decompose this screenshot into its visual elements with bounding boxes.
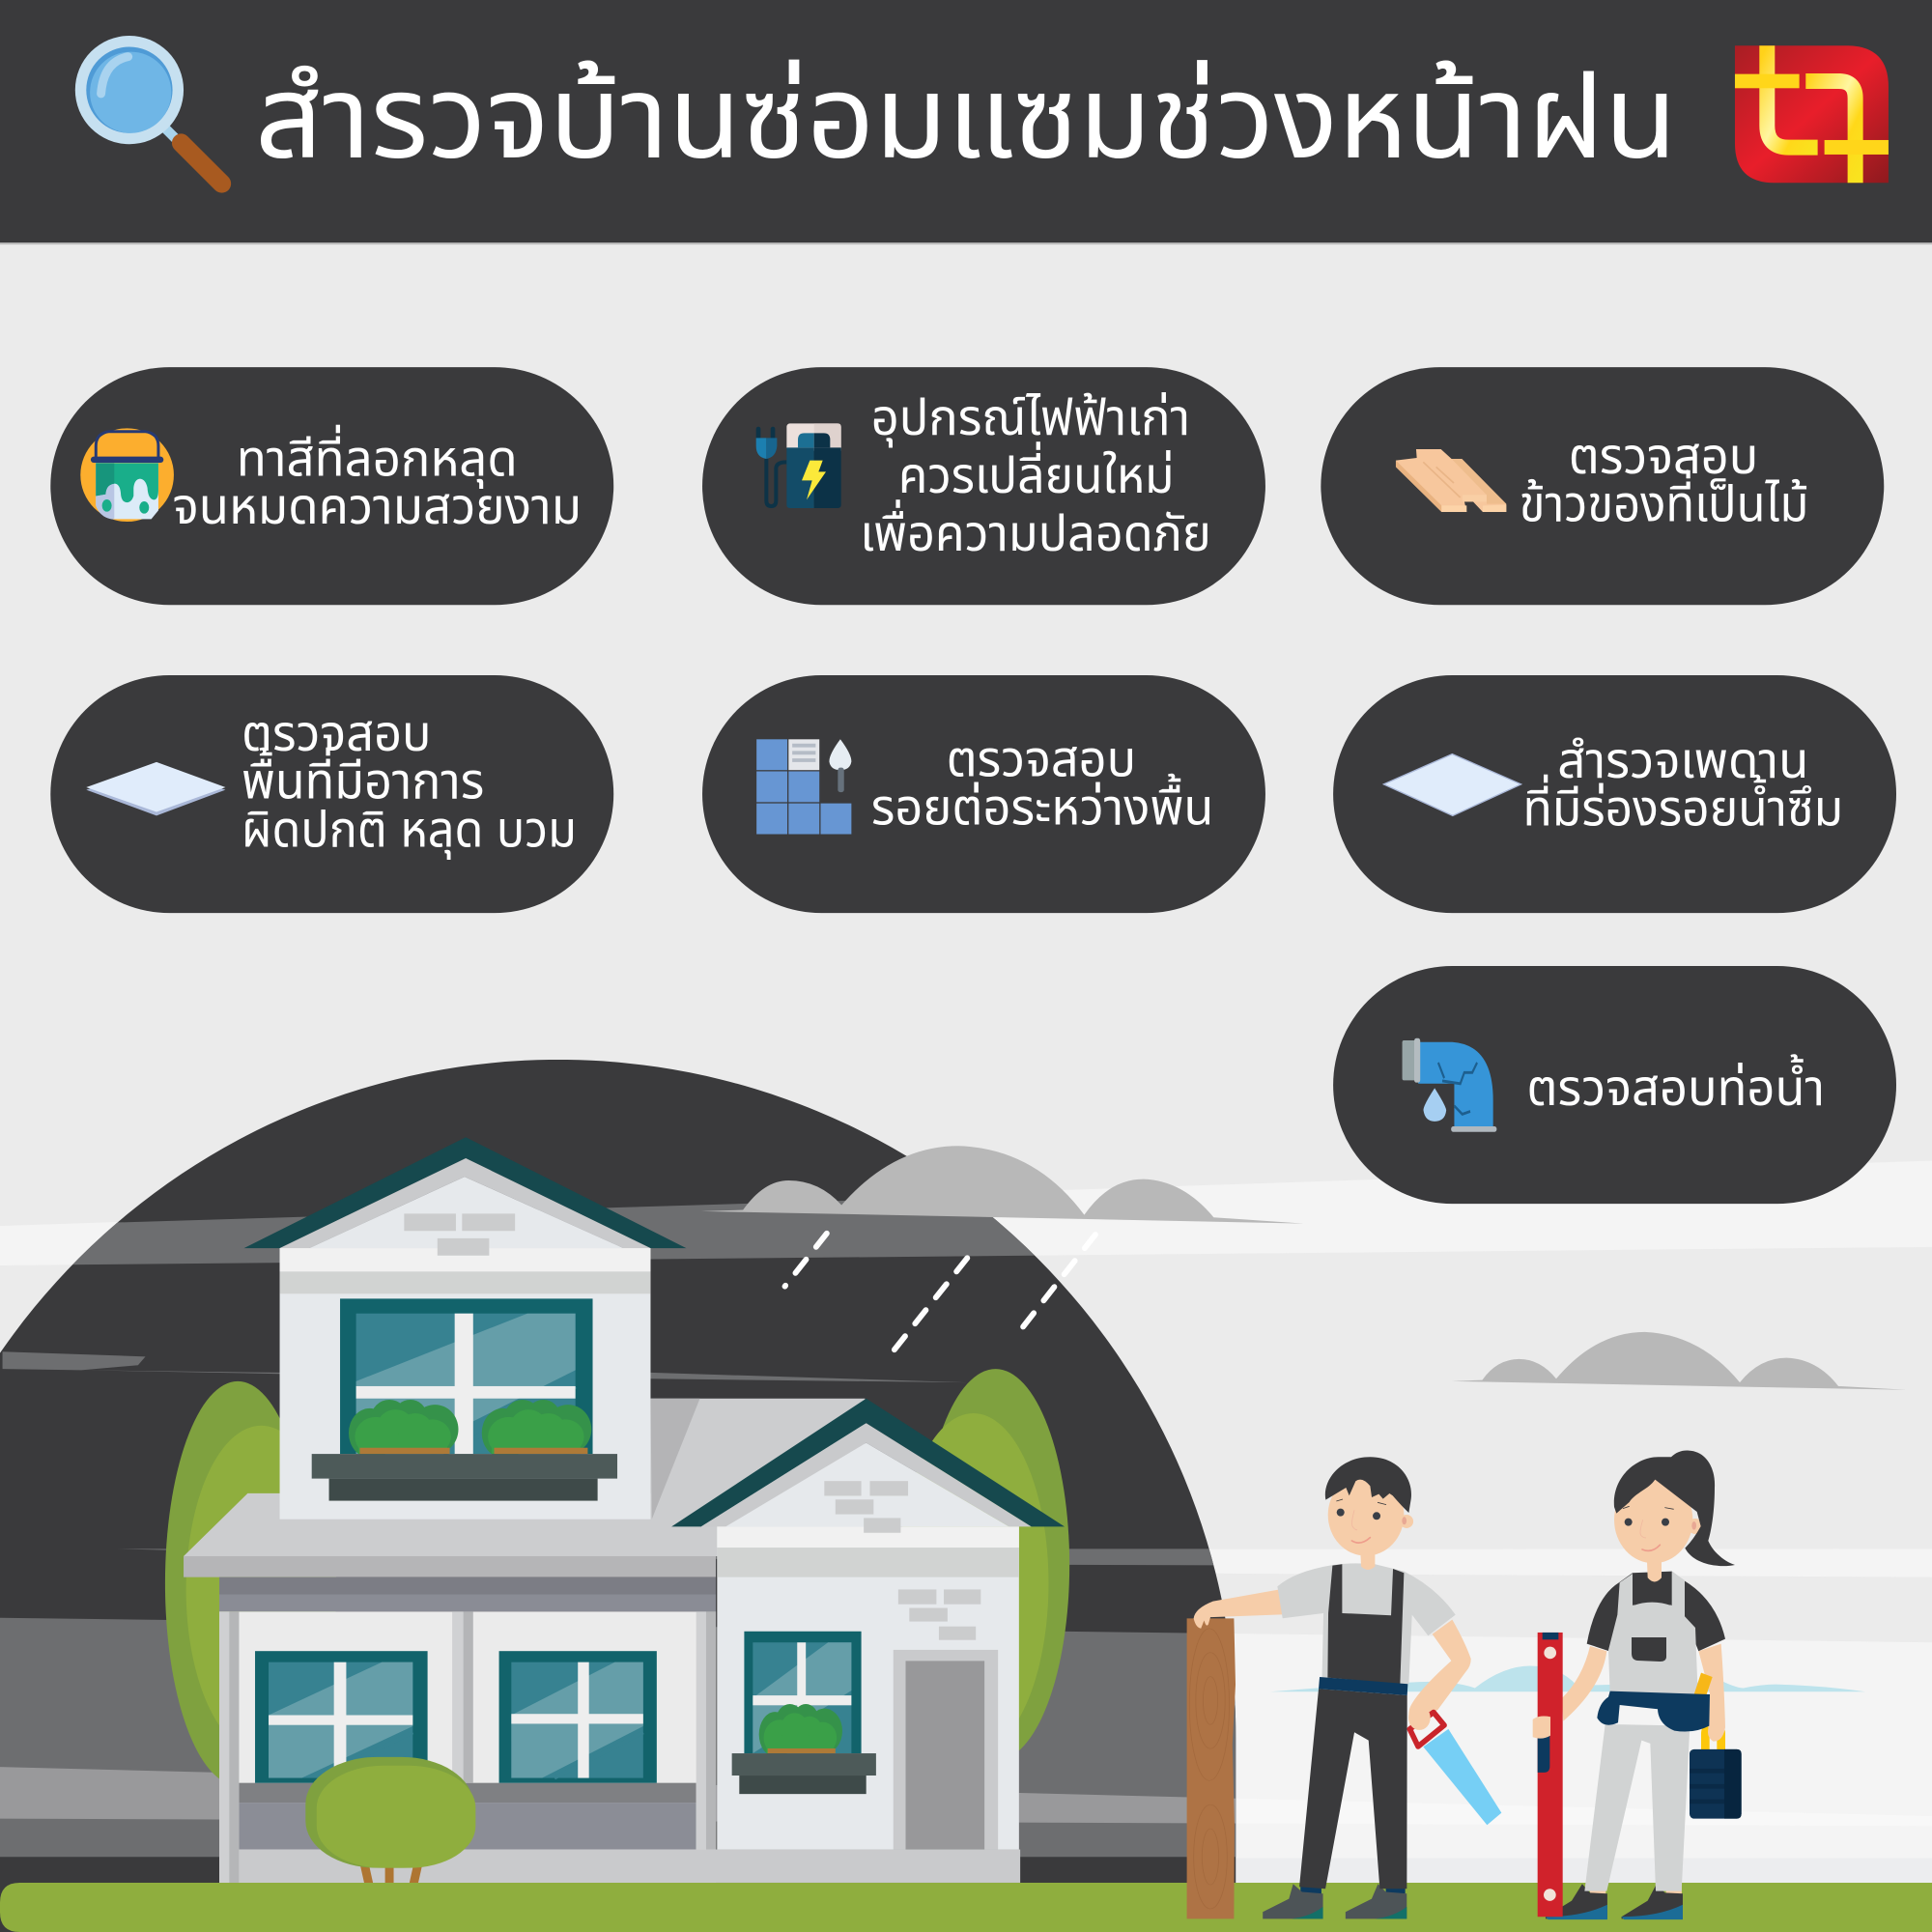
label: ตรวจสอบ <box>1569 429 1758 485</box>
front shrub <box>305 1757 475 1888</box>
label <box>242 706 577 860</box>
label <box>860 390 1211 562</box>
ground floor wall with columns <box>219 1611 1020 1883</box>
dormer flower boxes <box>312 1400 617 1501</box>
panel: floors <box>50 675 613 913</box>
shirt <box>1277 1563 1456 1684</box>
face <box>1336 1499 1386 1543</box>
wooden board <box>1187 1618 1236 1918</box>
arm resting on board <box>1194 1589 1285 1629</box>
label: เพื่อความปลอดภัย <box>860 499 1211 562</box>
panel: ceiling <box>1333 675 1896 913</box>
panel: floor joints <box>702 675 1265 913</box>
label: จนหมดความสวยงาม <box>173 479 582 535</box>
ground <box>0 1883 1932 1932</box>
belt bag <box>1597 1691 1710 1732</box>
label: สำรวจเพดาน <box>1557 733 1808 789</box>
label: ทาสีที่ลอกหลุด <box>237 424 518 489</box>
label <box>1520 429 1808 533</box>
panel: water pipes <box>1333 966 1896 1204</box>
overalls bib <box>1327 1564 1404 1684</box>
label: ผิดปกติ หลุด บวม <box>242 802 577 860</box>
overall bib <box>1608 1572 1698 1695</box>
icon: paint bucket <box>80 428 174 522</box>
panel: wooden items <box>1321 367 1884 605</box>
neck <box>1360 1553 1375 1570</box>
icon: cracked leaking pipe <box>1403 1038 1496 1132</box>
label <box>871 732 1213 836</box>
house <box>184 1137 1065 1888</box>
head <box>1328 1474 1404 1556</box>
spirit level <box>1533 1633 1563 1917</box>
annex with gable, window and door <box>671 1399 1065 1850</box>
man body <box>1277 1457 1501 1889</box>
icon: floor tile <box>86 762 225 815</box>
ground floor window right <box>499 1651 657 1783</box>
header bar <box>0 0 1932 244</box>
cloud: over the house <box>701 1146 1303 1224</box>
label: รอยต่อระหว่างพื้น <box>871 773 1213 836</box>
label: ตรวจสอบท่อน้ำ <box>1526 1054 1825 1117</box>
panel: peeling paint <box>50 367 613 605</box>
light weather streaks outside the dome <box>0 1161 1932 1886</box>
label <box>173 424 582 535</box>
trousers <box>1299 1689 1407 1889</box>
worker: woman with level and tool bag <box>1533 1451 1742 1919</box>
shirt <box>1587 1572 1725 1651</box>
cloud: pale blue horizon <box>1270 1665 1865 1691</box>
panel: old electrical equipment <box>702 367 1265 605</box>
cloud: right <box>1452 1332 1906 1390</box>
dark dome background <box>0 1060 1236 1932</box>
label: ควรเปลี่ยนใหม่ <box>898 441 1175 504</box>
saw <box>1408 1706 1501 1825</box>
dormer upper storey <box>244 1137 686 1520</box>
label: อุปกรณ์ไฟฟ้าเก่า <box>871 390 1190 448</box>
icon: wood planks <box>1396 449 1506 512</box>
belt <box>1319 1677 1407 1695</box>
label <box>1523 733 1843 838</box>
icon: ceiling panel <box>1383 754 1521 815</box>
hair <box>1325 1457 1411 1513</box>
woman body <box>1533 1451 1742 1917</box>
label: ตรวจสอบ <box>242 706 431 762</box>
icon: tiles and trowel <box>756 739 851 835</box>
head <box>1614 1476 1692 1563</box>
worker: man with saw <box>1194 1457 1501 1918</box>
right arm <box>1698 1644 1725 1742</box>
trees behind the house <box>165 1369 1069 1785</box>
tool bag <box>1690 1727 1742 1819</box>
rain streaks <box>784 1234 1095 1354</box>
title: สำรวจบ้านซ่อมแซมช่วงหน้าฝน <box>255 53 1677 183</box>
logo <box>1735 45 1889 183</box>
woman shoes <box>1546 1884 1683 1919</box>
face <box>1623 1506 1674 1550</box>
ground floor window left <box>255 1651 428 1783</box>
label: พื้นที่มีอาการ <box>242 748 484 810</box>
ruler <box>1693 1673 1713 1696</box>
main roof <box>184 1399 865 1611</box>
icon: magnifying glass <box>75 36 222 184</box>
left arm <box>1562 1646 1606 1721</box>
hair with ponytail <box>1614 1451 1735 1566</box>
shoes <box>1263 1884 1406 1918</box>
chest pocket <box>1632 1637 1666 1662</box>
label: ตรวจสอบ <box>947 732 1136 788</box>
label: ที่มีร่องรอยน้ำซึม <box>1523 775 1843 838</box>
right arm <box>1408 1620 1471 1727</box>
icon: electric plug and socket <box>756 423 841 508</box>
legs <box>1584 1724 1690 1891</box>
label: ข้าวของที่เป็นไม้ <box>1520 470 1808 533</box>
neck <box>1647 1562 1662 1581</box>
